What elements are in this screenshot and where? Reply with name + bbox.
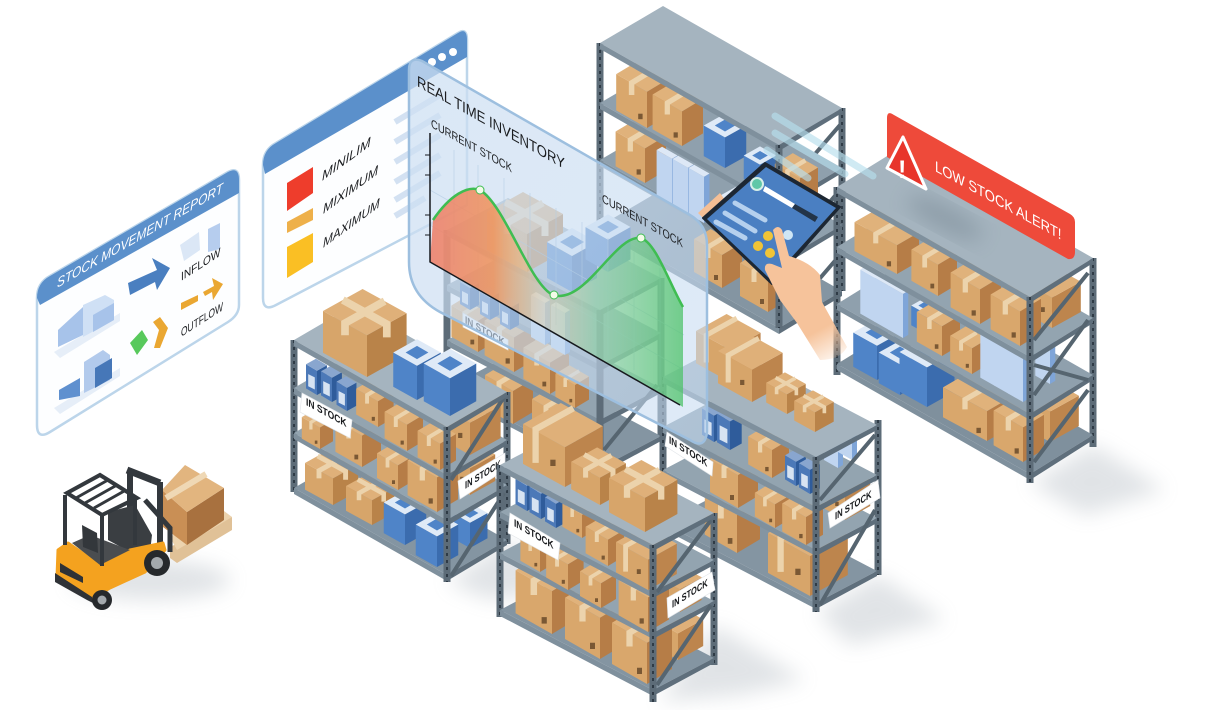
panel: stock levels <box>263 31 467 307</box>
shelf unit: behind chart <box>447 192 661 474</box>
legend swatch: yellow <box>287 233 313 278</box>
body <box>57 543 165 598</box>
in stock tag: IN STOCK <box>465 458 501 492</box>
arrow: outflow <box>181 278 223 310</box>
shadow under sign <box>903 189 987 247</box>
legend swatch: orange <box>287 208 313 233</box>
overhead guard <box>65 475 137 566</box>
left hand holding tablet <box>698 193 725 222</box>
legend labels: MAXIMUM <box>323 195 380 251</box>
window dots <box>428 48 457 66</box>
icon: warning triangle <box>887 137 926 189</box>
pointing hand <box>765 227 847 360</box>
shelf unit: back centre <box>600 6 842 334</box>
icon: inflow documents <box>180 223 220 261</box>
inflow label: INFLOW <box>181 244 221 284</box>
in stock tag <box>458 453 505 499</box>
legend labels: MINILIM <box>322 133 371 184</box>
chart title: REAL TIME INVENTORY <box>417 73 565 173</box>
current stock label: CURRENT STOCK <box>431 116 512 176</box>
outflow label: OUTFLOW <box>181 299 223 340</box>
wheels <box>92 550 170 610</box>
legend labels <box>322 133 380 251</box>
in stock tag: IN STOCK <box>306 396 347 430</box>
icon: warning triangle: ! <box>898 156 906 184</box>
panel title: STOCK MOVEMENT REPORT <box>57 179 225 291</box>
mast <box>127 470 170 552</box>
in stock tag <box>828 480 880 528</box>
current stock label: CURRENT STOCK <box>602 191 683 251</box>
light strips above tablet <box>767 116 873 178</box>
in stock tag: IN STOCK <box>672 577 708 611</box>
shelf unit: centre right <box>663 314 880 612</box>
cardboard box <box>162 465 224 545</box>
pallet <box>170 508 232 563</box>
low stock alert sign: LOW STOCK ALERT! <box>935 158 1061 244</box>
in stock tag: IN STOCK <box>669 434 708 470</box>
in stock tag <box>300 393 352 438</box>
legend swatch: red <box>287 167 313 211</box>
panel: real time inventory chart <box>409 60 707 444</box>
forklift with pallet <box>55 465 232 610</box>
icon: blue stock boxes <box>54 295 120 414</box>
stock line chart <box>425 133 684 407</box>
icon: green diamond and orange chevron <box>130 317 168 355</box>
shelf unit: front centre <box>500 403 715 702</box>
in stock tag: IN STOCK <box>514 518 554 552</box>
floor shadows <box>70 445 1165 702</box>
in stock tag <box>508 513 560 560</box>
low stock alert sign <box>887 113 1075 259</box>
shelf unit: front left <box>294 289 507 582</box>
tablet interface <box>716 178 818 258</box>
arrow: inflow <box>128 258 170 295</box>
shelf unit: low stock alert <box>837 113 1093 483</box>
in stock tag: IN STOCK <box>835 488 872 523</box>
panel: stock movement report <box>37 170 239 435</box>
legend labels: MIXIMUM <box>323 162 378 217</box>
engine and controls <box>108 505 152 552</box>
tablet <box>703 163 840 284</box>
in stock tag: IN STOCK <box>465 315 505 349</box>
